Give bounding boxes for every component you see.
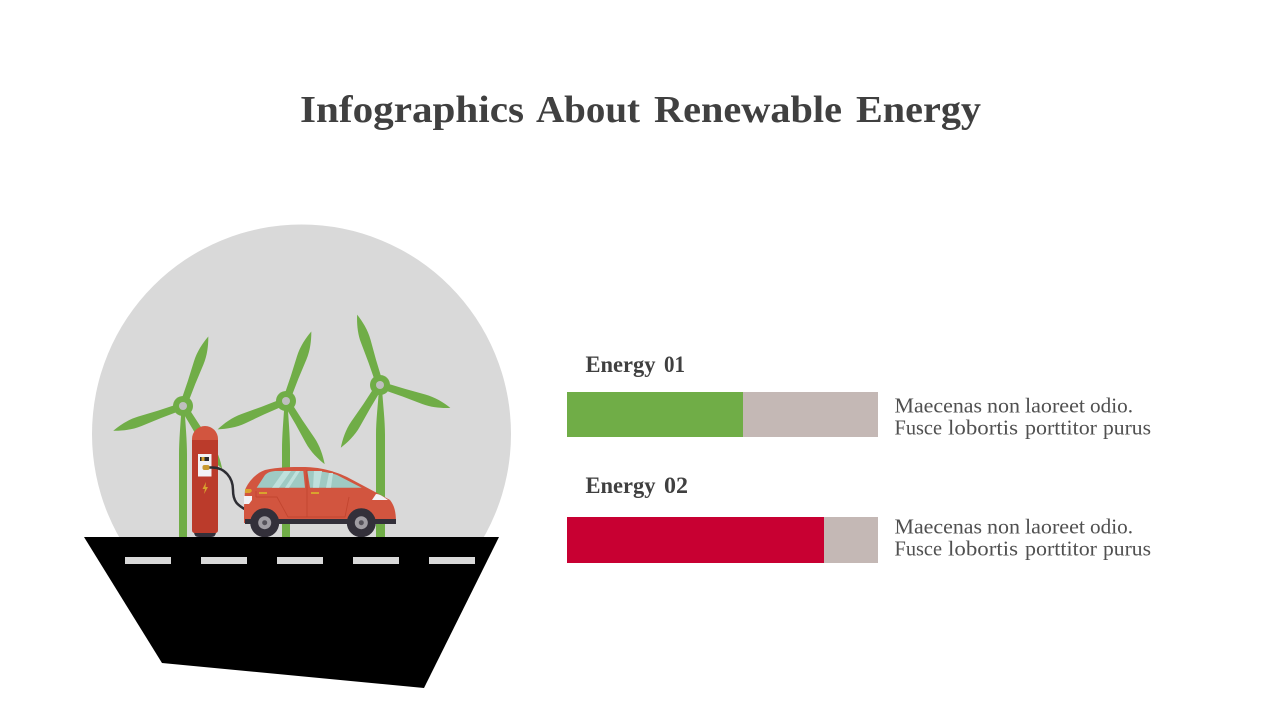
description: energy 01: non <box>987 394 1021 418</box>
description: energy 02: lobortis <box>948 536 1018 560</box>
description: energy 01: purus <box>1103 416 1151 440</box>
title: Infographics <box>300 89 524 131</box>
heading: energy 02: 02 <box>664 473 688 498</box>
description: energy 01 <box>894 394 1151 440</box>
description: energy 01: odio. <box>1090 394 1133 418</box>
panel: energy 01 <box>567 352 1151 440</box>
description: energy 02 <box>894 514 1151 560</box>
progress bar: energy 02 <box>567 517 878 563</box>
description: energy 01: porttitor <box>1025 416 1097 440</box>
description: energy 02: non <box>987 514 1021 538</box>
description: energy 01: Fusce <box>894 416 942 440</box>
background circle <box>92 224 511 644</box>
electric car <box>244 467 396 537</box>
heading: energy 01: Energy <box>586 352 656 377</box>
wind turbine 2 <box>216 330 329 537</box>
title: Renewable <box>654 89 842 131</box>
plug <box>202 465 210 470</box>
wind turbine 1 <box>112 335 227 537</box>
title: About <box>536 89 640 131</box>
progress bar: energy 01 <box>567 392 878 437</box>
description: energy 02: purus <box>1103 536 1151 560</box>
heading: energy 02 <box>586 473 688 498</box>
illustration: renewable energy scene <box>84 224 511 688</box>
title <box>300 89 981 131</box>
title: Energy <box>856 89 981 131</box>
charging cable <box>205 467 244 509</box>
road <box>84 537 499 688</box>
description: energy 02: porttitor <box>1025 536 1097 560</box>
description: energy 01: laoreet <box>1025 394 1085 418</box>
description: energy 01: Maecenas <box>894 394 982 418</box>
description: energy 02: odio. <box>1090 514 1133 538</box>
heading: energy 02: Energy <box>586 473 656 498</box>
description: energy 02: Fusce <box>894 536 942 560</box>
panel: energy 02 <box>567 473 1151 563</box>
description: energy 02: laoreet <box>1025 514 1085 538</box>
wind turbine 3 <box>336 313 452 537</box>
heading: energy 01: 01 <box>664 352 685 377</box>
description: energy 02: Maecenas <box>894 514 982 538</box>
description: energy 01: lobortis <box>948 416 1018 440</box>
charging station <box>192 426 218 537</box>
